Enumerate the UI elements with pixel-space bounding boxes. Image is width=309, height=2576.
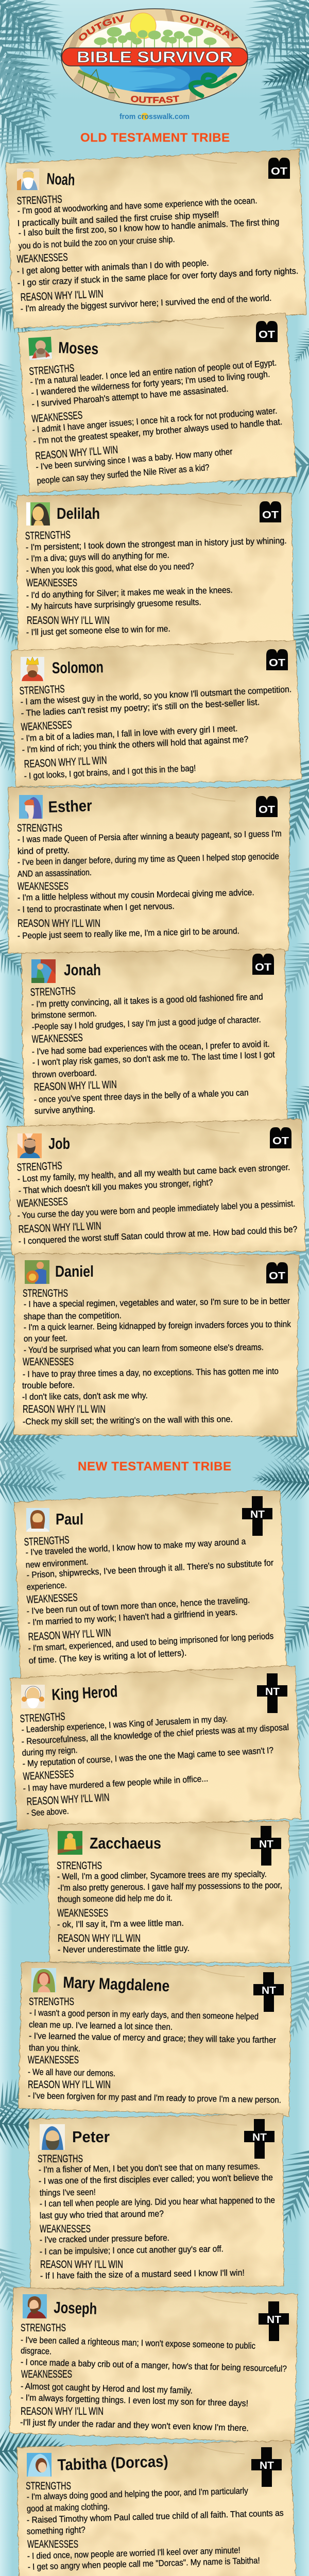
text block: strengths: STRENGTHS xyxy=(20,1710,65,1725)
text block: strengths: - Well, I'm a good climber, Sycamore trees are my specialty. xyxy=(57,1869,267,1882)
text block: strengths: on your feet. xyxy=(24,1333,67,1344)
text block: weaknesses: - I get along better with animals than I do with people. xyxy=(16,258,209,276)
badge: NT: NT xyxy=(267,2314,281,2326)
badge: NT xyxy=(257,1673,287,1713)
text block: strengths: - I'm a fisher of Men, I bet you don't see that on many resumes. xyxy=(39,2161,260,2175)
badge: OT xyxy=(252,954,274,975)
text block: strengths xyxy=(26,2480,284,2536)
text block: weaknesses: - I can be impulsive; I once cut another guy's ear off. xyxy=(40,2244,224,2257)
text block: weaknesses xyxy=(26,1591,250,1628)
text block: strengths: last guy who tried that around me? xyxy=(40,2209,164,2221)
badge: OT: OT xyxy=(262,510,279,521)
text block: weaknesses: WEAKNESSES xyxy=(21,719,72,733)
text block: strengths: STRENGTHS xyxy=(21,2322,66,2334)
name: Solomon xyxy=(52,658,104,677)
text block: strengths xyxy=(38,2153,275,2221)
text block: strengths xyxy=(21,2322,287,2374)
text block: weaknesses: WEAKNESSES xyxy=(28,2054,79,2066)
name: Tabitha (Dorcas) xyxy=(57,2452,168,2474)
badge: NT: NT xyxy=(260,2460,274,2471)
text block: strengths: STRENGTHS xyxy=(17,822,62,834)
text block: strengths: STRENGTHS xyxy=(57,1860,102,1872)
badge: NT xyxy=(251,2447,282,2487)
text block: strengths: shape than the competition. xyxy=(24,1311,122,1321)
portrait: King Herod xyxy=(21,1685,45,1708)
text block: strengths: - Lost my family, my health, and all my wealth but came back even stronger. xyxy=(17,1162,290,1184)
name: Joseph xyxy=(54,2298,97,2318)
text block: weaknesses: - I tend to procrastinate when I get nervous. xyxy=(18,901,175,914)
text block: reason why I'll win xyxy=(20,2405,249,2433)
panel: Jonah xyxy=(21,949,287,1131)
text block: reason why I'll win: - People just seem to really like me, I'm a nice girl to be around. xyxy=(18,926,239,941)
text block: strengths: STRENGTHS xyxy=(19,683,65,697)
text block: weaknesses xyxy=(16,251,299,288)
text block: strengths: - I'm always doing good and helping the poor, and I'm particularly xyxy=(27,2486,248,2502)
text block: strengths: you do is not build the zoo on your cruise ship. xyxy=(18,234,175,251)
text block: reason why I'll win: survive anything. xyxy=(35,1104,95,1116)
text block: strengths xyxy=(19,683,292,718)
portrait: Esther xyxy=(19,795,43,819)
text block: strengths: STRENGTHS xyxy=(26,2480,71,2492)
text block: strengths: though someone did help me do it. xyxy=(58,1893,173,1904)
text block: weaknesses: - I may have murdered a few people while in office... xyxy=(23,1774,209,1793)
portrait: Delilah xyxy=(26,502,50,526)
text block: weaknesses: - I'm not the greatest speaker, my brother always used to handle that. xyxy=(33,417,283,446)
text block: reason why I'll win: REASON WHY I'LL WIN xyxy=(23,1403,106,1415)
text block: weaknesses: - I'm a little helpless without my cousin Mordecai giving me advice. xyxy=(18,888,254,903)
panel: Joseph xyxy=(10,2287,298,2443)
text block: strengths: - I can tell when people are lying. Did you hear what happened to the xyxy=(40,2195,275,2209)
name: Moses xyxy=(58,338,99,358)
text block: strengths xyxy=(57,1860,282,1904)
text block: weaknesses: - I'd do anything for Silver; it makes me weak in the knees. xyxy=(26,585,233,600)
text block: reason why I'll win: people can say they surfed the Nile River as a kid? xyxy=(37,463,210,486)
text block: weaknesses: WEAKNESSES xyxy=(18,880,68,892)
text block: reason why I'll win xyxy=(33,1079,249,1116)
text block: reason why I'll win: REASON WHY I'LL WIN xyxy=(24,754,107,770)
text block: strengths: - The ladies can't resist my poetry; it's still on the best-seller list. xyxy=(21,697,260,718)
badge: NT: NT xyxy=(259,1839,273,1850)
name: Zacchaeus xyxy=(90,1834,161,1852)
text block: strengths xyxy=(24,1534,274,1592)
text block: weaknesses: - I'm married to my work; I haven't had a girlfriend in years. xyxy=(27,1607,238,1628)
badge: NT: NT xyxy=(265,1686,280,1698)
portrait: Tabitha xyxy=(27,2453,52,2477)
text block: strengths: clean me up. I've learned a lot since then. xyxy=(29,2020,173,2032)
text block: reason why I'll win: REASON WHY I'LL WIN xyxy=(35,444,118,462)
text block: reason why I'll win: REASON WHY I'LL WIN xyxy=(18,1220,101,1235)
text block: strengths: STRENGTHS xyxy=(25,529,71,542)
text block: strengths: - I also built the first zoo, so I know how to handle animals. The first thing xyxy=(18,217,280,238)
panel: Tabitha (Dorcas) xyxy=(17,2441,297,2576)
text block: reason why I'll win: REASON WHY I'LL WIN xyxy=(28,1627,111,1643)
text block: strengths: STRENGTHS xyxy=(29,362,75,378)
text block: weaknesses: WEAKNESSES xyxy=(26,1591,78,1606)
text block: weaknesses: - My haircuts have surprisingly gruesome results. xyxy=(26,597,201,612)
text block: weaknesses: - I'm a bit of a ladies man, I fall in love with every girl I meet. xyxy=(21,723,238,743)
text block: strengths: - Resourcefulness, all the knowledge of the chief priests was at my disposal xyxy=(21,1722,289,1747)
text block: strengths xyxy=(20,1710,289,1769)
logo title: BIBLE SURVIVOR xyxy=(77,48,233,66)
text block: weaknesses: - Almost got caught by Herod and lost my family. xyxy=(21,2381,193,2396)
path text: outpray: OUTPRAY xyxy=(180,15,239,41)
panel: King Herod xyxy=(10,1666,301,1830)
text block: reason why I'll win xyxy=(18,918,239,941)
text block: strengths: I practically built and sailed the first cruise ship myself! xyxy=(17,210,219,228)
name: Daniel xyxy=(55,1262,94,1280)
name: Job xyxy=(48,1134,70,1153)
icon: snake xyxy=(191,75,235,96)
text block: strengths: STRENGTHS xyxy=(38,2153,83,2165)
text block: reason why I'll win: -Check my skill set; the writing's on the wall with this one. xyxy=(23,1414,233,1427)
text block: weaknesses xyxy=(22,1356,279,1402)
badge: OT xyxy=(270,1127,291,1148)
text block: weaknesses xyxy=(27,2538,260,2572)
icon: grasshopper xyxy=(78,70,119,98)
text block: reason why I'll win xyxy=(28,2079,281,2105)
text block: strengths: - I'm pretty convincing, all it takes is a good old fashioned fire and xyxy=(31,992,263,1009)
name: Paul xyxy=(56,1510,83,1528)
text block: weaknesses: -I don't like cats, don't ask me why. xyxy=(22,1391,148,1402)
text block: strengths: - I survived Pharoah's attempt to have me assasinated. xyxy=(31,384,229,409)
text block: weaknesses xyxy=(28,2054,115,2078)
water xyxy=(79,66,230,93)
text block: strengths: - I'm persistent; I took down the strongest man in history just by whining. xyxy=(26,536,287,552)
text block: strengths xyxy=(16,193,280,251)
text block: reason why I'll win: REASON WHY I'LL WIN xyxy=(27,615,110,626)
text block: strengths: - My reputation of course, I was the one the Magi came to see wasn't I? xyxy=(22,1745,274,1769)
text block: strengths: experience. xyxy=(26,1580,67,1592)
text block: weaknesses: - ok, I'll say it, I'm a wee little man. xyxy=(57,1918,184,1929)
name: Esther xyxy=(48,796,92,816)
text block: weaknesses: - I have to pray three times a day, no exceptions. This has gotten me into xyxy=(23,1366,279,1379)
text block: reason why I'll win xyxy=(40,2259,245,2281)
text block: weaknesses: WEAKNESSES xyxy=(40,2223,91,2235)
panel: Delilah xyxy=(17,493,294,659)
text block: weaknesses: - I admit I have anger issues; I once hit a rock for not producing water. xyxy=(32,406,278,435)
text block: weaknesses: thrown overboard. xyxy=(32,1068,97,1080)
text block: strengths: - I've been in danger before, during my time as Queen I helped stop genocide xyxy=(18,851,279,867)
text block: weaknesses: WEAKNESSES xyxy=(21,2368,72,2380)
text block: strengths: - I am the wisest guy in the world, so you know I'll outsmart the competition. xyxy=(20,684,292,707)
text block: reason why I'll win: - once you've spent three days in the belly of a whale you can xyxy=(34,1088,249,1105)
text block: weaknesses: WEAKNESSES xyxy=(27,2538,78,2550)
portrait: Jonah xyxy=(31,959,56,983)
text block: strengths xyxy=(17,822,282,879)
name: Delilah xyxy=(57,504,100,522)
name: Peter xyxy=(72,2128,110,2146)
badge: OT: OT xyxy=(259,329,275,341)
portrait: Mary Magdalene xyxy=(31,1968,56,1992)
text block: strengths: - I wasn't a good person in my early days, and then someone helped xyxy=(29,2008,259,2022)
text block: reason why I'll win xyxy=(58,1933,190,1955)
text block: strengths: STRENGTHS xyxy=(30,985,76,998)
text block: reason why I'll win: REASON WHY I'LL WIN xyxy=(18,918,100,929)
text block: strengths: - I'm a natural leader. I once led an entire nation of people out of Egypt. xyxy=(30,358,277,387)
text block: reason why I'll win: REASON WHY I'LL WIN xyxy=(33,1079,117,1093)
text block: reason why I'll win: - I got looks, I got brains, and I got this in the bag! xyxy=(24,763,196,781)
text block: reason why I'll win: REASON WHY I'LL WIN xyxy=(20,288,104,303)
text block: weaknesses: trouble before. xyxy=(22,1380,75,1391)
text block: weaknesses: - I've been run out of town more than once, hence the traveling. xyxy=(26,1595,250,1616)
text block: reason why I'll win: - I've been surviving since I was a baby. How many other xyxy=(36,447,233,472)
text block: strengths: STRENGTHS xyxy=(16,1160,62,1174)
text block: strengths: STRENGTHS xyxy=(16,193,62,207)
panel: Job xyxy=(7,1119,305,1255)
text block: reason why I'll win: REASON WHY I'LL WIN xyxy=(28,2079,111,2091)
portrait: Job xyxy=(18,1133,42,1158)
badge: OT: OT xyxy=(255,962,271,973)
badge: NT xyxy=(251,1826,281,1866)
badge: OT: OT xyxy=(259,804,275,816)
text block: reason why I'll win: REASON WHY I'LL WIN xyxy=(58,1933,141,1944)
panel: Noah xyxy=(6,149,306,328)
badge: OT: OT xyxy=(269,1270,285,1282)
text block: strengths: - I was one of the first disciples ever called; you won't believe the xyxy=(39,2173,273,2186)
text block: weaknesses xyxy=(57,1907,184,1929)
text block: strengths: brimstone sermon. xyxy=(31,1009,97,1021)
panel: Zacchaeus xyxy=(48,1821,289,1963)
text block: strengths: things I've seen! xyxy=(40,2187,96,2198)
badge: NT xyxy=(242,1496,272,1536)
badge: OT xyxy=(268,158,290,179)
panel: Moses xyxy=(19,313,297,493)
text block: weaknesses: - I'm always forgetting things. I even lost my son for three days! xyxy=(21,2393,248,2409)
text block: reason why I'll win xyxy=(35,444,233,486)
text block: strengths: -I'm also pretty generous. I gave half my possessions to the poor, xyxy=(58,1880,282,1893)
text block: weaknesses: - I'm kind of rich; you think the others will hold that against me? xyxy=(22,734,249,755)
text block: strengths: STRENGTHS xyxy=(24,1534,70,1548)
text block: strengths: STRENGTHS xyxy=(23,1287,68,1299)
text block: weaknesses: WEAKNESSES xyxy=(16,1196,68,1210)
text block: reason why I'll win: REASON WHY I'LL WIN xyxy=(21,2405,104,2417)
text block: reason why I'll win xyxy=(26,615,170,637)
text block: strengths: - I've been called a righteous man; I won't expose someone to public xyxy=(21,2335,256,2351)
text block: reason why I'll win: - If I have faith the size of a mustard seed I know I'll win! xyxy=(40,2268,245,2281)
sun xyxy=(130,13,156,39)
text block: strengths xyxy=(16,1160,290,1196)
text block: strengths xyxy=(25,529,287,575)
text block: weaknesses: - I won't play risk games, so don't ask me to. The last time I lost I got xyxy=(32,1049,275,1067)
text block: reason why I'll win: - I've been forgiven for my past and I'm ready to prove I'm a new person. xyxy=(28,2091,281,2105)
portrait: Solomon xyxy=(21,657,44,681)
text block: reason why I'll win xyxy=(26,1791,110,1818)
text block: strengths: -People say I hold grudges, I say I'm just a good judge of character. xyxy=(32,1014,261,1032)
text block: weaknesses xyxy=(40,2223,224,2257)
text block: weaknesses xyxy=(21,2368,248,2409)
panel: Solomon xyxy=(11,640,301,787)
text block: strengths xyxy=(30,985,263,1032)
text block: strengths xyxy=(23,1287,291,1355)
text block: strengths: good at making clothing. xyxy=(27,2502,110,2514)
text block: reason why I'll win: - Never underestimate the little guy. xyxy=(58,1943,190,1955)
badge: NT: NT xyxy=(262,1985,276,1996)
text block: strengths: - I'm good at woodworking and have some experience with the ocean. xyxy=(17,196,258,216)
text block: reason why I'll win: - I'm smart, experienced, and used to being imprisoned for long periods xyxy=(28,1631,274,1653)
text block: strengths: STRENGTHS xyxy=(29,1996,74,2008)
text block: reason why I'll win xyxy=(24,754,196,781)
badge: OT xyxy=(266,1262,288,1283)
panel: Mary Magdalene xyxy=(19,1962,291,2116)
text block: strengths: - I was made Queen of Persia after winning a beauty pageant, so I guess I'm xyxy=(18,828,282,844)
name: Jonah xyxy=(64,961,101,979)
text block: weaknesses xyxy=(21,719,249,755)
name: Noah xyxy=(46,170,75,189)
name: Mary Magdalene xyxy=(63,1973,170,1995)
text block: weaknesses: WEAKNESSES xyxy=(23,1356,74,1368)
badge: OT: OT xyxy=(272,1136,289,1147)
heading: new testament tribe: NEW TESTAMENT TRIBE xyxy=(78,1460,231,1473)
text block: weaknesses xyxy=(18,880,254,914)
text block: reason why I'll win: REASON WHY I'LL WIN xyxy=(40,2259,123,2270)
text block: weaknesses: - I've cracked under pressure before. xyxy=(40,2233,169,2245)
text block: strengths: - Prison, shipwrecks, I've been through it all. There's no substitute for xyxy=(26,1558,274,1580)
portrait: Peter xyxy=(40,2124,65,2150)
badge: OT xyxy=(256,321,278,342)
text block: strengths: kind of pretty. xyxy=(18,845,70,856)
text block: weaknesses: - I get so angry when people call me "Dorcas". My name is Tabitha! xyxy=(28,2555,260,2572)
text block: reason why I'll win xyxy=(28,1627,274,1666)
portrait: Daniel xyxy=(25,1260,49,1284)
text block: strengths: AND an assassination. xyxy=(18,868,92,879)
badge: OT: OT xyxy=(269,657,285,669)
text block: reason why I'll win: - I'm already the biggest survivor here; I survived the end of the world. xyxy=(20,293,272,314)
red banner xyxy=(62,48,248,66)
text block: weaknesses: WEAKNESSES xyxy=(57,1907,108,1919)
text block: reason why I'll win: of time. (The key is writing a lot of letters). xyxy=(28,1648,187,1666)
badge: NT xyxy=(259,2301,289,2341)
text block: strengths: - I've traveled the world, I know how to make my way around a xyxy=(25,1536,246,1557)
text block: strengths: - I once made a baby crib out of a manger, how's that for being resourceful? xyxy=(21,2357,287,2374)
text block: strengths: - Leadership experience, I was King of Jerusalem in my day. xyxy=(21,1714,228,1735)
badge: OT: OT xyxy=(271,166,287,177)
text block: reason why I'll win: REASON WHY I'LL WIN xyxy=(26,1791,110,1808)
text block: weaknesses: WEAKNESSES xyxy=(23,1768,74,1783)
text block: weaknesses: WEAKNESSES xyxy=(26,577,77,589)
text block: weaknesses: WEAKNESSES xyxy=(31,1032,83,1045)
badge: NT: NT xyxy=(252,2132,267,2143)
text block: strengths: than you think. xyxy=(29,2043,80,2054)
text block: strengths: - That which doesn't kill you makes you stronger, right? xyxy=(18,1178,213,1196)
badge: OT xyxy=(260,501,281,522)
text block: strengths: disgrace. xyxy=(21,2346,52,2357)
text block: weaknesses xyxy=(26,577,233,612)
panel: Esther xyxy=(8,787,290,953)
logo: Bible Survivor emblem xyxy=(61,8,248,106)
text block: weaknesses: - I died once, now people are worried I'll keel over any minute! xyxy=(27,2545,241,2561)
text block: reason why I'll win: - I'll just get someone else to win for me. xyxy=(26,624,170,637)
portrait: Moses xyxy=(28,337,52,360)
text block: strengths: - I wandered the wilderness for forty years; I'm used to living rough. xyxy=(31,369,270,398)
panel: Paul xyxy=(14,1490,286,1681)
text block: strengths: during my reign. xyxy=(22,1745,78,1758)
palm trees xyxy=(94,27,216,47)
portrait: Noah xyxy=(17,168,39,190)
text block: strengths: - I'm a diva; guys will do anything for me. xyxy=(26,550,169,564)
text block: reason why I'll win xyxy=(23,1403,233,1427)
text block: strengths: - You'd be surprised what you can learn from someone else's dreams. xyxy=(24,1342,264,1355)
text block: strengths: - When you look this good, what else do you need? xyxy=(26,561,194,575)
badge: NT xyxy=(253,1972,284,2012)
text block: weaknesses xyxy=(31,1032,275,1080)
badge: NT: NT xyxy=(250,1509,265,1520)
path text: outfast: OUTFAST xyxy=(131,95,179,103)
badge: OT xyxy=(266,649,288,670)
text block: reason why I'll win: - See above. xyxy=(26,1806,69,1818)
text block: strengths: - I've learned the value of mercy and grace; they will take you farther xyxy=(29,2031,277,2045)
text block: weaknesses: WEAKNESSES xyxy=(31,409,83,425)
panel: Peter xyxy=(28,2114,284,2289)
text block: strengths: - I have a special regimen, vegetables and water, so I'm sure to be in better xyxy=(24,1296,290,1309)
text block: weaknesses: WEAKNESSES xyxy=(16,251,68,265)
portrait: Joseph xyxy=(23,2294,47,2318)
portrait: Paul xyxy=(26,1508,49,1532)
heading: old testament tribe: OLD TESTAMENT TRIBE xyxy=(80,131,230,145)
crosswalk logo: from crosswalk.com xyxy=(119,112,190,121)
badge: NT xyxy=(244,2119,274,2159)
text block: strengths: - Raised Timothy whom Paul called true child of all faith. That counts as xyxy=(27,2508,284,2525)
portrait: Zacchaeus xyxy=(58,1831,82,1855)
text block: weaknesses: - I've had some bad experiences with the ocean, I prefer to avoid it. xyxy=(32,1039,270,1057)
text block: strengths: new environment. xyxy=(25,1557,89,1570)
name: King Herod xyxy=(52,1682,118,1704)
text block: strengths xyxy=(29,358,277,409)
text block: weaknesses: - We all have our demons. xyxy=(28,2067,115,2078)
text block: strengths: something right? xyxy=(27,2525,85,2536)
panel: Daniel xyxy=(14,1253,299,1436)
text block: reason why I'll win: -I'll just fly under the radar and they won't even know I'm there. xyxy=(20,2417,249,2433)
badge: OT xyxy=(256,796,278,817)
text block: weaknesses: - I go stir crazy if stuck in the same place for over forty days and forty nights. xyxy=(17,266,299,288)
text block: strengths xyxy=(29,1996,277,2054)
